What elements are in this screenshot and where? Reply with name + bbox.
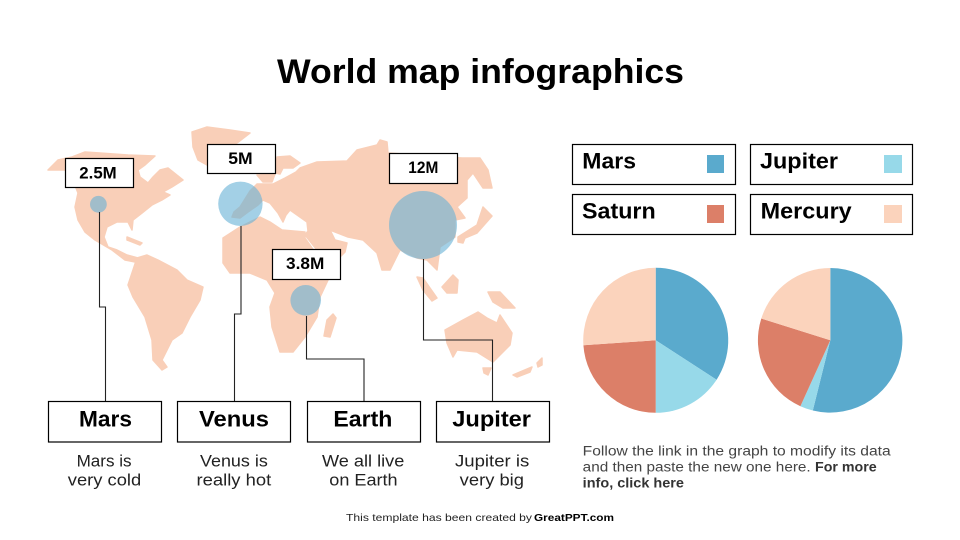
value label: 2.5M: 2.5M xyxy=(79,163,117,182)
value label: 3.8M: 3.8M xyxy=(286,254,324,273)
card: Earth: We all live xyxy=(322,453,404,471)
card: Mars: very cold xyxy=(68,472,141,490)
bubble: Mars xyxy=(90,196,107,213)
card: Jupiter: Jupiter xyxy=(452,406,531,432)
value label: 12M: 12M xyxy=(408,158,438,177)
world map xyxy=(48,127,542,377)
bubble: Earth xyxy=(290,285,321,316)
map: Australia xyxy=(445,312,512,362)
legend item: Mercury xyxy=(750,194,912,234)
connector: Venus xyxy=(234,226,241,402)
note text: For more xyxy=(815,460,877,475)
note text: Follow the link in the graph to modify its data xyxy=(583,444,891,459)
map: Scandinavia xyxy=(275,156,300,174)
connector: Mars xyxy=(100,212,106,402)
map: Tasmania xyxy=(483,368,491,375)
value label: 5M xyxy=(208,144,276,174)
map: Cuba xyxy=(127,237,142,245)
value label: 5M: 5M xyxy=(228,149,253,168)
card: Earth: on Earth xyxy=(329,472,398,490)
footer credit: This template has been created by xyxy=(346,512,533,524)
map: Greenland xyxy=(192,127,250,165)
value label: 3.8M xyxy=(272,250,340,280)
map: North America xyxy=(48,152,183,262)
card: Mars: Mars xyxy=(79,406,132,432)
legend item: Saturn: Saturn xyxy=(582,198,656,224)
map: Britain and Denmark xyxy=(257,174,275,182)
note text: info, click here xyxy=(583,476,685,491)
value label: 2.5M xyxy=(66,158,134,188)
card: Jupiter: very big xyxy=(460,472,524,490)
footer credit: GreatPPT.com xyxy=(534,512,614,524)
footer credit xyxy=(346,512,614,524)
map: South America xyxy=(128,255,203,370)
title: World map infographics xyxy=(277,53,684,91)
map: New Zealand xyxy=(513,358,542,377)
map: New Guinea xyxy=(488,292,515,308)
note text xyxy=(583,444,891,491)
pie chart: right xyxy=(758,268,902,413)
card: Jupiter: Jupiter is xyxy=(455,453,529,471)
map: Sumatra xyxy=(417,277,437,301)
card: Jupiter xyxy=(436,402,550,490)
connector: Jupiter xyxy=(424,259,492,402)
bubble: Jupiter xyxy=(389,191,457,259)
legend xyxy=(572,144,912,234)
map: Madagascar xyxy=(324,314,336,337)
legend item: Mercury: Mercury xyxy=(761,198,853,224)
legend item: Jupiter: Jupiter xyxy=(760,148,838,174)
card: Earth xyxy=(308,402,420,490)
card: Venus xyxy=(178,402,290,490)
card: Venus: Venus is xyxy=(200,453,268,471)
map: Eurasia xyxy=(232,140,492,270)
bubble: Venus xyxy=(218,182,263,226)
card: Earth: Earth xyxy=(333,406,392,432)
card: Mars xyxy=(48,402,162,490)
legend item: Mars: Mars xyxy=(582,148,636,174)
card: Venus: really hot xyxy=(196,472,272,490)
legend item: Mars xyxy=(572,144,736,184)
card: Venus: Venus xyxy=(199,406,269,432)
value label: 12M xyxy=(390,154,458,184)
legend item: Jupiter xyxy=(750,144,912,184)
legend item: Saturn xyxy=(572,194,736,234)
pie chart: left xyxy=(583,268,728,413)
note text: and then paste the new one here. xyxy=(583,460,811,475)
map: Borneo xyxy=(442,275,458,293)
map: Japan xyxy=(458,207,492,243)
map: Africa xyxy=(223,217,328,352)
connector: Earth xyxy=(306,316,364,402)
card: Mars: Mars is xyxy=(77,453,132,471)
